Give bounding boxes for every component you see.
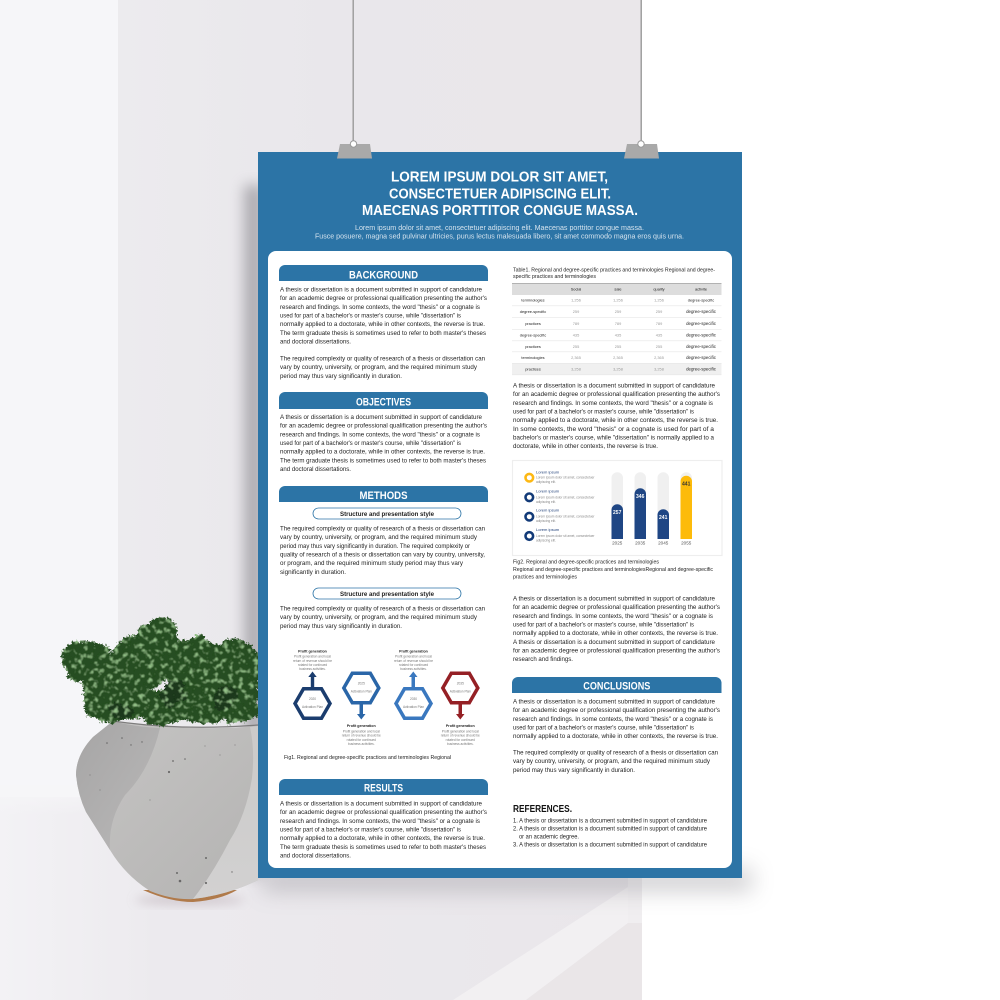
hexagon step: 2020: Profit generation: [298, 650, 327, 654]
text block: background: used for part of a bachelor's or master's course, while "dissertation" is: [280, 312, 462, 320]
text block: conclusions: A thesis or dissertation is a document submitted in support of candidature: [513, 698, 715, 706]
chart panel: [512, 460, 722, 556]
pot shadow: [135, 895, 245, 905]
text block: table discussion: A thesis or dissertation is a document submitted in support of candidature: [513, 382, 715, 390]
hexagon step: 2020: return of revenue should be: [293, 659, 332, 663]
legend item 4: [526, 527, 595, 542]
table 1: practices: [525, 366, 541, 372]
bar: 2035: 346: [636, 494, 645, 500]
text block: methods 1: period may thus vary significantly in duration. The required complexity or: [280, 543, 471, 550]
heading: references: REFERENCES.: [513, 804, 572, 815]
text block: figure discussion: for an academic degree or professional qualification presenting the author's: [513, 648, 721, 654]
table 1: 2,365: [613, 355, 623, 360]
table 1: degree-specific: [688, 298, 714, 302]
text block: table discussion: bachelor's or master's course, while "dissertation" is normally applied to a: [513, 434, 714, 442]
hexagon step: 2035: rotated for continued: [446, 738, 475, 742]
text block: table discussion: [513, 382, 721, 450]
list: references: [513, 818, 707, 848]
text block: background: A thesis or dissertation is a document submitted in support of candidature: [280, 286, 482, 294]
text block: figure discussion: research and findings. In some contexts, the word "thesis" or a cognate is: [513, 613, 714, 620]
legend item 4: Lorem ipsum: [536, 527, 560, 532]
hexagon step: 2035: return of revenue should be: [441, 734, 480, 738]
figure 1 caption: Fig1. Regional and degree-specific practices and terminologies Regional: [284, 755, 451, 761]
bar: 2025: [612, 472, 623, 546]
text block: conclusions: The required complexity or quality of research of a thesis or dissertation can: [513, 750, 718, 756]
hexagon step: 2035: [441, 673, 480, 746]
text block: figure discussion: research and findings.: [513, 656, 573, 663]
table 1: 255: [656, 344, 662, 349]
heading: methods: METHODS: [360, 490, 408, 502]
text block: background: [280, 286, 488, 380]
text block: conclusions: period may thus vary significantly in duration.: [513, 767, 635, 774]
legend item 4: adipiscing elit.: [536, 538, 556, 542]
hexagon step: 2025: 2025: [358, 682, 365, 686]
table 1: degree-specific: [686, 309, 717, 314]
text block: methods 2: period may thus vary significantly in duration.: [280, 623, 402, 630]
hexagon step: 2035: business activities.: [447, 742, 474, 746]
clip: right: [624, 141, 659, 158]
text block: table discussion: normally applied to a doctorate, while in other contexts, the reverse is true.: [513, 417, 718, 424]
table 1: terminologies: [521, 355, 545, 360]
hexagon step: 2020: rotated for continued: [298, 663, 327, 667]
text block: methods 1: or program, and the required minimum study period may thus vary: [280, 560, 464, 567]
text block: conclusions: research and findings. In some contexts, the word "thesis" or a cognate is: [513, 716, 714, 723]
figure 2 caption: practices and terminologies: [513, 574, 577, 580]
title: MAECENAS PORTTITOR CONGUE MASSA.: [362, 203, 638, 219]
hexagon step: 2030: [394, 650, 433, 718]
hexagon step: 2030: return of revenue should be: [394, 659, 433, 663]
poster shadow: [244, 185, 752, 892]
text block: methods 2: The required complexity or quality of research of a thesis or dissertation can: [280, 606, 485, 612]
text block: table discussion: used for part of a bachelor's or master's course, while "dissertation" is: [513, 408, 695, 416]
bar: 2035: [634, 472, 646, 546]
text block: objectives: The term graduate thesis is sometimes used to refer to both master's theses: [280, 457, 487, 464]
subtitle: [315, 225, 684, 240]
poster: blue board: [258, 141, 742, 878]
text block: figure discussion: [513, 596, 721, 663]
heading: conclusions: CONCLUSIONS: [583, 680, 650, 692]
heading: background: BACKGROUND: [349, 270, 418, 282]
diagram: hexagon timeline: [293, 650, 480, 746]
legend item 3: [526, 508, 595, 523]
text block: results: and doctoral dissertations.: [280, 852, 351, 860]
hexagon step: 2035: Profit generation: [446, 724, 475, 728]
text block: background: The term graduate thesis is sometimes used to refer to both master's theses: [280, 330, 487, 337]
table 1: quality: [653, 286, 665, 292]
bar: 2025: 2025: [612, 540, 623, 546]
figure 2 caption: Regional and degree-specific practices and terminologiesRegional and degree-specific: [513, 567, 713, 573]
text block: results: A thesis or dissertation is a document submitted in support of candidature: [280, 800, 482, 808]
text block: figure discussion: A thesis or dissertation is a document submitted in support of candidature: [513, 639, 715, 646]
text block: results: used for part of a bachelor's or master's course, while "dissertation" is: [280, 826, 462, 834]
text block: conclusions: normally applied to a doctorate, while in other contexts, the reverse is true.: [513, 733, 718, 740]
text block: background: vary by country, university, or program, and the required minimum study: [280, 364, 478, 371]
legend item 1: [526, 470, 595, 484]
table 1: terminologies: [521, 298, 545, 302]
text block: objectives: used for part of a bachelor's or master's course, while "dissertation" is: [280, 440, 462, 447]
text block: objectives: normally applied to a doctorate, while in other contexts, the reverse is true.: [280, 449, 485, 456]
subtitle: Lorem ipsum dolor sit amet, consectetuer adipiscing elit. Maecenas porttitor congue massa.: [355, 225, 644, 232]
table 1: degree-specific: [686, 355, 717, 360]
text block: conclusions: vary by country, university, or program, and the required minimum study: [513, 758, 711, 765]
hexagon step: 2025: business activities.: [348, 742, 375, 746]
table 1: 3,258: [571, 366, 581, 372]
text block: methods 2: vary by country, university, or program, and the required minimum study: [280, 614, 478, 621]
heading: objectives: [279, 392, 488, 409]
table 1: 789: [656, 321, 662, 326]
table 1: 435: [656, 332, 662, 338]
table 1: 259: [656, 309, 662, 314]
bar: 2045: 2045: [658, 540, 669, 546]
legend item 2: [526, 488, 595, 504]
table 1: sale: [614, 286, 622, 292]
text block: methods 1: The required complexity or quality of research of a thesis or dissertation can: [280, 526, 485, 532]
text block: results: for an academic degree or professional qualification presenting the author's: [280, 809, 488, 816]
text block: objectives: [280, 414, 488, 473]
table 1: degree-specific: [520, 332, 546, 338]
white content panel: [268, 251, 732, 868]
hexagon step: 2025: Profit generation: [347, 724, 376, 728]
legend item 4: Lorem ipsum dolor sit amet, consectetuer: [536, 534, 595, 538]
text block: figure discussion: used for part of a bachelor's or master's course, while "dissertation" is: [513, 622, 695, 628]
table 1: 259: [615, 309, 621, 314]
hexagon step: 2035: Activation Plan: [450, 690, 471, 694]
hexagon step: 2025: rotated for continued: [347, 738, 376, 742]
table 1: 255: [615, 344, 621, 349]
legend item 1: adipiscing elit.: [536, 480, 556, 484]
text block: background: and doctoral dissertations.: [280, 338, 351, 346]
hexagon step: 2020: business activities.: [299, 667, 326, 671]
heading: results: [279, 779, 488, 795]
table 1: practices: [525, 321, 541, 326]
text block: methods 1: vary by country, university, or program, and the required minimum study: [280, 534, 478, 541]
text block: table discussion: for an academic degree or professional qualification presenting the author's: [513, 391, 721, 398]
clip: left: [337, 141, 372, 158]
table 1: 255: [573, 344, 579, 349]
hexagon step: 2030: business activities.: [400, 667, 427, 671]
hexagon step: 2025: return of revenue should be: [342, 734, 381, 738]
table 1: activite: [695, 286, 707, 292]
hexagon step: 2035: 2035: [457, 682, 464, 686]
text block: results: The term graduate thesis is sometimes used to refer to both master's theses: [280, 844, 487, 851]
heading: methods: [279, 486, 488, 502]
text block: methods 1: quality of research of a thesis or dissertation can vary by country, university,: [280, 552, 485, 558]
pill: structure and presentation style 2: Structure and presentation style: [340, 591, 434, 598]
table 1: 435: [573, 332, 579, 338]
text block: conclusions: used for part of a bachelor's or master's course, while "dissertation" is: [513, 724, 695, 732]
pot: [76, 721, 258, 902]
hexagon step: 2030: Profit generation: [399, 650, 428, 654]
hanging wires and clips: [352, 0, 642, 143]
text block: figure discussion: normally applied to a doctorate, while in other contexts, the reverse is true.: [513, 630, 718, 637]
potted moss plant: [60, 619, 264, 905]
legend item 1: Lorem ipsum: [536, 470, 560, 474]
figure 2 caption: [513, 560, 713, 580]
text block: methods 1: [280, 526, 485, 576]
hexagon step: 2020: Activation Plan: [302, 705, 323, 709]
hexagon step: 2025: Activation Plan: [351, 690, 372, 694]
list: references: 3. A thesis or dissertation is a document submitted in support of candidature: [513, 842, 707, 848]
legend item 3: Lorem ipsum: [536, 508, 560, 512]
hexagon step: 2025: Profit generation and local: [343, 730, 380, 734]
legend item 1: Lorem ipsum dolor sit amet, consectetuer: [536, 476, 595, 480]
text block: table discussion: In some contexts, the word "thesis" or a cognate is used for part of a: [513, 426, 714, 433]
list: references: 2. A thesis or dissertation is a document submitted in support of candidature: [513, 826, 707, 832]
bar: 2055: 441: [682, 482, 691, 488]
legend item 3: Lorem ipsum dolor sit amet, consectetuer: [536, 514, 595, 518]
text block: objectives: research and findings. In some contexts, the word "thesis" or a cognate is: [280, 431, 481, 438]
legend item 2: adipiscing elit.: [536, 500, 556, 504]
title: [362, 170, 638, 219]
subtitle: Fusce posuere, magna sed pulvinar ultricies, purus lectus malesuada libero, sit amet commodo magna eros quis urna.: [315, 234, 684, 240]
bar: 2045: [658, 472, 669, 546]
text block: figure discussion: A thesis or dissertation is a document submitted in support of candidature: [513, 596, 715, 602]
table 1 caption: specific practices and terminologies: [513, 274, 596, 280]
bar: 2055: [680, 472, 692, 546]
table 1: 2,365: [571, 355, 581, 360]
list: references: or an academic degree.: [519, 834, 579, 840]
table 1: [512, 283, 722, 375]
table 1: degree-specific: [686, 344, 717, 349]
hexagon step: 2020: Profit generation and local: [294, 654, 331, 658]
hexagon step: 2030: 2030: [410, 697, 417, 701]
text block: methods 2: [280, 606, 485, 630]
moss: [60, 619, 264, 726]
figure 2 caption: Fig2. Regional and degree-specific practices and terminologies: [513, 560, 659, 566]
pill: structure and presentation style 1: [313, 508, 461, 519]
hexagon step: 2030: Activation Plan: [403, 705, 424, 709]
legend item 2: Lorem ipsum dolor sit amet, consectetuer: [536, 496, 595, 500]
title: LOREM IPSUM DOLOR SIT AMET,: [391, 170, 608, 186]
text block: figure discussion: for an academic degree or professional qualification presenting the author's: [513, 604, 721, 611]
legend item 3: adipiscing elit.: [536, 519, 556, 523]
heading: results: RESULTS: [364, 782, 403, 794]
list: references: 1. A thesis or dissertation is a document submitted in support of candidature: [513, 818, 707, 824]
table 1: degree-specific: [686, 321, 717, 326]
heading: objectives: OBJECTIVES: [356, 396, 411, 408]
hexagon step: 2030: Profit generation and local: [395, 654, 432, 658]
text block: background: normally applied to a doctorate, while in other contexts, the reverse is true.: [280, 321, 485, 328]
bar: 2055: 2055: [681, 540, 692, 546]
text block: background: period may thus vary significantly in duration.: [280, 373, 402, 380]
table 1: practices: [525, 344, 541, 349]
text block: background: for an academic degree or professional qualification presenting the author's: [280, 295, 488, 302]
text block: methods 1: significantly in duration.: [280, 569, 346, 576]
title: CONSECTETUER ADIPISCING ELIT.: [389, 186, 611, 202]
bar: 2045: 241: [659, 515, 668, 521]
text block: background: The required complexity or quality of research of a thesis or dissertation can: [280, 356, 485, 362]
table 1: degree-specific: [686, 367, 717, 372]
bar: 2025: 257: [613, 510, 622, 516]
table 1: 259: [573, 309, 579, 314]
pill: structure and presentation style 1: Structure and presentation style: [340, 511, 434, 518]
text block: results: normally applied to a doctorate, while in other contexts, the reverse is true.: [280, 835, 485, 842]
table 1: 2,365: [654, 355, 664, 360]
table 1: degree-specific: [686, 333, 717, 338]
table 1: 1,256: [654, 298, 664, 302]
bar: 2035: 2035: [635, 540, 646, 546]
legend item 2: Lorem ipsum: [536, 488, 560, 494]
table 1: Social: [571, 286, 581, 292]
hexagon step: 2030: rotated for continued: [399, 663, 428, 667]
table 1 caption: Table1. Regional and degree-specific practices and terminologies Regional and degree-: [513, 268, 715, 274]
text block: results: research and findings. In some contexts, the word "thesis" or a cognate is: [280, 818, 481, 825]
heading: conclusions: [512, 677, 722, 693]
table 1: 3,258: [654, 366, 664, 372]
table 1: degree-specific: [520, 309, 546, 314]
hexagon step: 2020: 2020: [309, 697, 316, 701]
hexagon step: 2035: Profit generation and local: [442, 730, 479, 734]
text block: conclusions: for an academic degree or professional qualification presenting the author's: [513, 707, 721, 714]
hexagon step: 2025: [342, 673, 381, 746]
table 1: 789: [615, 321, 621, 326]
pill: structure and presentation style 2: [313, 588, 461, 599]
table 1 caption: [513, 268, 715, 280]
text block: objectives: A thesis or dissertation is a document submitted in support of candidature: [280, 414, 482, 421]
table 1: 3,258: [613, 366, 623, 372]
text block: table discussion: doctorate, while in other contexts, the reverse is true.: [513, 443, 658, 450]
heading: background: [279, 265, 488, 282]
table 1: 1,256: [571, 298, 581, 302]
text block: conclusions: [513, 698, 721, 774]
table 1: 1,256: [613, 298, 623, 302]
text block: results: [280, 800, 488, 860]
text block: objectives: and doctoral dissertations.: [280, 466, 351, 473]
table 1: 789: [573, 321, 579, 326]
table 1: 435: [615, 332, 621, 338]
text block: table discussion: research and findings. In some contexts, the word "thesis" or a cognate is: [513, 400, 714, 407]
text block: background: research and findings. In some contexts, the word "thesis" or a cognate is: [280, 304, 481, 311]
hexagon step: 2020: [293, 650, 332, 718]
text block: objectives: for an academic degree or professional qualification presenting the author's: [280, 423, 488, 430]
